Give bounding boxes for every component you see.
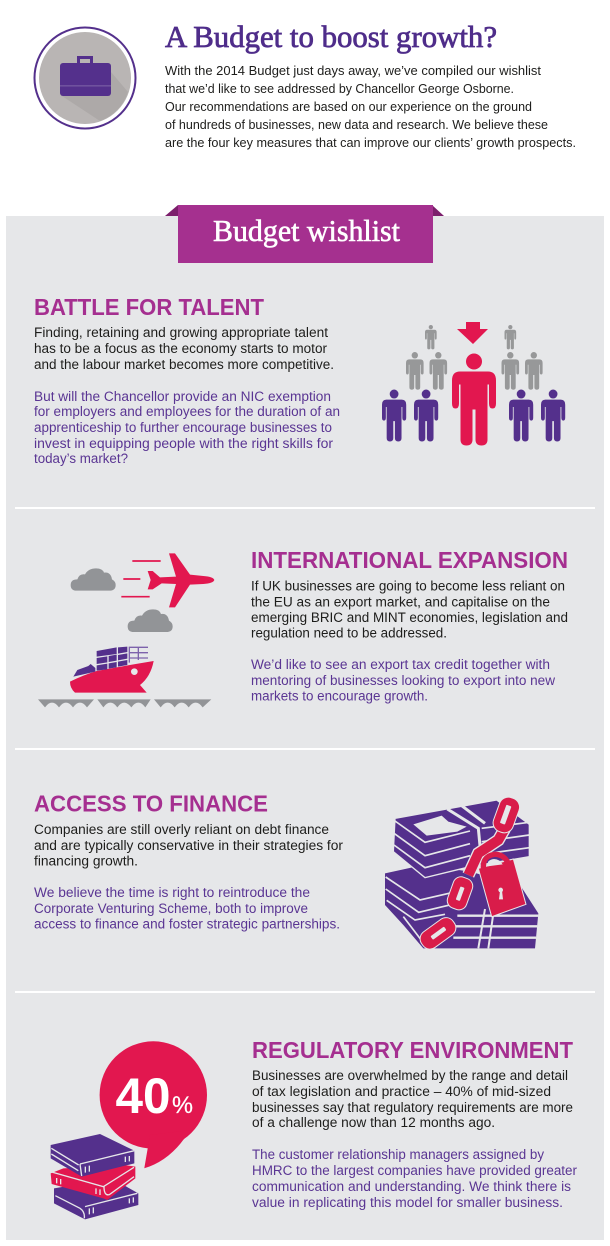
heading: regulatory environment: REGULATORY ENVIRONMENT xyxy=(252,1037,574,1063)
text: battle for talent body: has to be a focus as the economy starts to motor xyxy=(34,341,328,356)
intro text: are the four key measures that can improve our clients’ growth prospects. xyxy=(165,135,576,150)
section: regulatory environment xyxy=(51,1037,578,1219)
text: international expansion recommendation xyxy=(251,657,555,704)
text: international expansion body: regulation need to be addressed. xyxy=(251,626,447,640)
text: international expansion recommendation: mentoring of businesses looking to export into new xyxy=(251,673,555,688)
title: A Budget to boost growth? xyxy=(165,20,497,54)
text: battle for talent recommendation: for employers and employees for the duration of an xyxy=(34,404,340,419)
text: access to finance recommendation: Corporate Venturing Scheme, both to improve xyxy=(34,901,308,916)
banner: budget wishlist xyxy=(165,205,444,263)
heading: access to finance: ACCESS TO FINANCE xyxy=(34,790,268,816)
icon: briefcase roundel xyxy=(34,28,136,128)
section: access to finance xyxy=(34,790,538,953)
text: access to finance recommendation xyxy=(34,885,340,932)
icon: plane, clouds and cargo ship xyxy=(38,553,214,707)
text: access to finance body xyxy=(34,822,344,868)
lower stack xyxy=(385,865,538,948)
text: battle for talent recommendation: invest in equipping people with the right skills for xyxy=(34,436,334,451)
text: regulatory environment recommendation xyxy=(252,1147,578,1210)
upper stack xyxy=(393,800,529,878)
text: access to finance recommendation: access to finance and foster strategic partnerships. xyxy=(34,916,340,932)
text: access to finance body: financing growth. xyxy=(34,854,138,868)
callout: 40% speech bubble xyxy=(100,1041,207,1168)
text: battle for talent recommendation: apprenticeship to further encourage businesses to xyxy=(34,420,332,435)
text: international expansion body xyxy=(251,578,568,640)
text: battle for talent body: Finding, retaining and growing appropriate talent xyxy=(34,325,328,340)
text: regulatory environment recommendation: HMRC to the largest companies have provided greater xyxy=(252,1163,578,1178)
heading: international expansion: INTERNATIONAL EXPANSION xyxy=(251,547,568,573)
icon: banknotes with chain and padlock xyxy=(385,795,538,953)
heading: battle for talent: BATTLE FOR TALENT xyxy=(34,294,265,320)
intro text: With the 2014 Budget just days away, we’ve compiled our wishlist xyxy=(165,63,541,78)
text: international expansion recommendation: We’d like to see an export tax credit together with xyxy=(251,657,550,672)
icon: people with arrow xyxy=(382,322,565,446)
text: access to finance recommendation: We believe the time is right to reintroduce the xyxy=(34,885,310,900)
text: regulatory environment body: of a challenge now than 12 months ago. xyxy=(252,1115,495,1130)
text: battle for talent body: and the labour market becomes more competitive. xyxy=(34,357,334,372)
icon: stack of books xyxy=(51,1134,138,1219)
section: battle for talent xyxy=(34,294,565,466)
text: battle for talent recommendation: today’s market? xyxy=(34,451,128,466)
text: international expansion body: the EU as an export market, and capitalise on the xyxy=(251,594,550,610)
banner: budget wishlist: Budget wishlist xyxy=(213,213,400,248)
section: international expansion xyxy=(38,547,568,707)
text: international expansion body: emerging BRIC and MINT economies, legislation and xyxy=(251,610,568,625)
text: battle for talent recommendation: But will the Chancellor provide an NIC exemption xyxy=(34,389,331,404)
text: regulatory environment recommendation: The customer relationship managers assigned by xyxy=(252,1147,544,1162)
intro text: of hundreds of businesses, new data and research. We believe these xyxy=(165,117,548,132)
text: regulatory environment body: of tax legislation and practice – 40% of mid-sized xyxy=(252,1084,551,1099)
text: battle for talent body xyxy=(34,325,334,372)
text: regulatory environment body: businesses say that regulatory requirements are more xyxy=(252,1100,573,1115)
text: access to finance body: Companies are still overly reliant on debt finance xyxy=(34,822,329,837)
chain and padlock xyxy=(468,828,505,875)
text: regulatory environment recommendation: value in replicating this model for smaller business. xyxy=(252,1195,563,1210)
text: regulatory environment body xyxy=(252,1068,573,1130)
text: access to finance body: and are typically conservative in their strategies for xyxy=(34,838,344,853)
intro text xyxy=(165,63,576,150)
text: regulatory environment recommendation: communication and understanding. We think there is xyxy=(252,1179,571,1194)
intro text: that we’d like to see addressed by Chancellor George Osborne. xyxy=(165,81,514,96)
text: international expansion body: If UK businesses are going to become less reliant on xyxy=(251,578,565,594)
text: regulatory environment body: Businesses are overwhelmed by the range and detail xyxy=(252,1068,568,1083)
callout: 40% speech bubble: 40 xyxy=(116,1068,170,1124)
text: international expansion recommendation: markets to encourage growth. xyxy=(251,688,428,704)
text: battle for talent recommendation xyxy=(34,389,340,466)
callout: 40% speech bubble: % xyxy=(172,1092,193,1119)
intro text: Our recommendations are based on our experience on the ground xyxy=(165,99,532,114)
